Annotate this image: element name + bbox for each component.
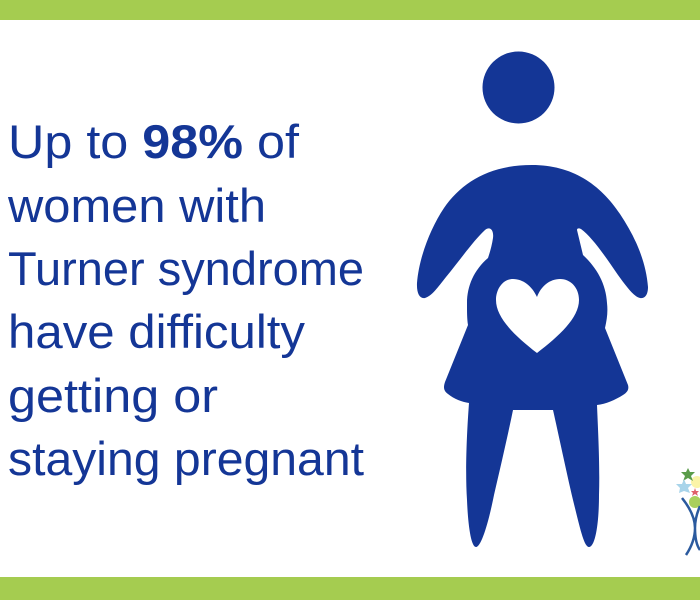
icon: pregnant woman with heart [417, 52, 648, 547]
statistic text block: getting or [8, 369, 218, 422]
statistic text block: have difficulty [8, 305, 306, 358]
statistic text block [7, 115, 364, 485]
head [482, 52, 554, 124]
statistic text block: Turner syndrome [8, 242, 364, 295]
statistic text block: staying pregnant [8, 432, 364, 485]
icon: green star [681, 468, 695, 481]
statistic text block: Up to 98% of [8, 115, 300, 168]
figure strokes [682, 498, 700, 555]
top green band [0, 0, 700, 20]
bottom green band [0, 577, 700, 600]
statistic text block: women with [7, 179, 266, 232]
icon: light blue star [676, 479, 692, 493]
heart cutout [496, 279, 579, 353]
icon: yellow circle [691, 476, 700, 488]
icon: green circle [689, 496, 700, 508]
logo: stars and figure [676, 468, 700, 555]
body [417, 165, 648, 547]
icon: red star [691, 488, 699, 496]
